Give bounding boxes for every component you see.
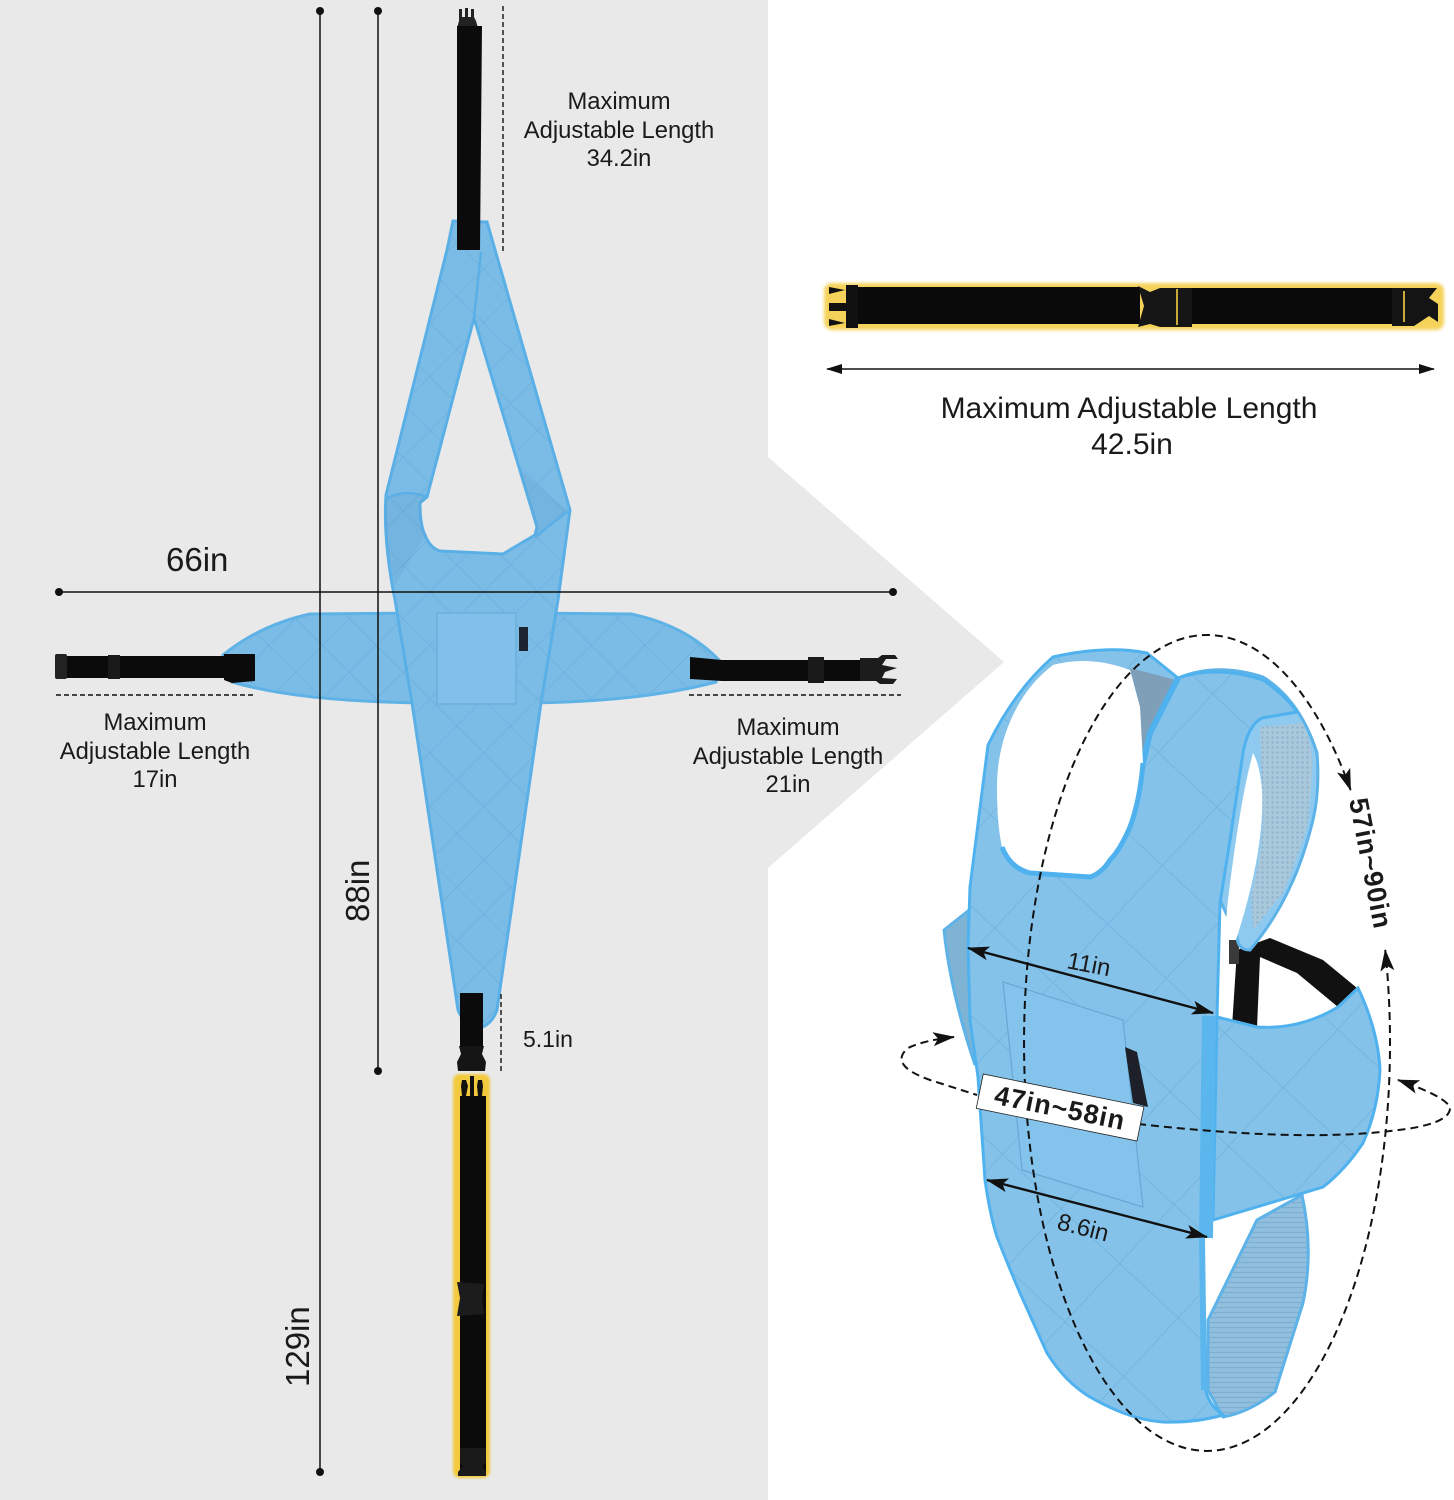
belt length arrow	[827, 368, 1434, 370]
arm hole	[997, 661, 1143, 877]
label: top strap length: Adjustable Length	[524, 117, 714, 144]
vertical dimension 88in: 88in	[339, 860, 376, 922]
label: right strap length: Adjustable Length	[693, 743, 883, 770]
left wing	[223, 613, 430, 703]
right strap	[690, 655, 898, 684]
belt length label: Maximum Adjustable Length	[941, 392, 1317, 425]
label: 8.6in: 8.6in	[1055, 1209, 1112, 1247]
shoulder mesh	[1251, 723, 1312, 930]
dashed guides	[56, 6, 901, 1071]
label: top strap length: Maximum	[567, 88, 671, 115]
label: left strap length: 17in	[132, 766, 178, 793]
lower mesh lining	[1208, 1195, 1308, 1417]
label: left strap length: Maximum	[103, 709, 207, 736]
left side wing	[944, 911, 975, 1065]
lower seam binding	[1202, 1238, 1204, 1390]
vertical dimension 129in	[279, 7, 324, 1476]
flat sling product	[55, 8, 898, 1478]
waist label box: 47in~58in	[992, 1080, 1128, 1136]
vertical dashed loop arrow	[1024, 635, 1390, 1451]
waist loop arrow right	[1138, 1080, 1450, 1135]
sling body	[385, 221, 570, 1028]
width arrow 8.6in	[987, 1180, 1207, 1237]
right wing	[525, 613, 719, 703]
belt length label: 42.5in	[1091, 428, 1173, 461]
pocket	[437, 613, 516, 704]
back strap	[1232, 938, 1357, 1028]
arm hole binding	[1002, 763, 1143, 877]
left strap	[55, 654, 255, 683]
waist label box	[976, 1074, 1144, 1141]
strap slider	[1229, 932, 1239, 964]
vertical dimension 129in: 129in	[279, 1306, 316, 1387]
label: 57in~90in: 57in~90in	[1343, 795, 1398, 932]
label: 5.1in: 5.1in	[523, 1026, 573, 1052]
strap binding line	[386, 252, 568, 537]
front binding	[1143, 678, 1178, 763]
white gap beside shoulder	[1224, 753, 1262, 940]
extension belt	[824, 283, 1444, 330]
label: 11in: 11in	[1065, 947, 1113, 982]
shoulder pad	[1178, 670, 1318, 950]
yellow outlined strap	[453, 1074, 490, 1478]
worn sling product	[944, 650, 1380, 1422]
horizontal dimension 66in: 66in	[166, 541, 228, 578]
gray background panel	[0, 0, 1004, 1500]
label: right strap length: Maximum	[736, 714, 840, 741]
horizontal dimension 66in	[55, 541, 897, 596]
pocket label	[1125, 1047, 1148, 1107]
waist loop arrow left	[902, 1037, 977, 1095]
center seam binding	[1206, 1016, 1209, 1238]
top strap with buckle	[457, 8, 482, 250]
label: left strap length: Adjustable Length	[60, 738, 250, 765]
label: right strap length: 21in	[766, 771, 810, 798]
width arrow 11in	[968, 948, 1213, 1013]
right wing	[1213, 988, 1380, 1220]
vest body	[968, 650, 1297, 1422]
mesh back strip	[1130, 668, 1176, 763]
pocket	[1003, 982, 1143, 1207]
body fold shading	[385, 470, 568, 585]
lower strap with buckle	[457, 993, 486, 1071]
pocket label	[519, 627, 528, 651]
vertical dimension 88in	[339, 7, 382, 1075]
label: top strap length: 34.2in	[587, 145, 651, 172]
